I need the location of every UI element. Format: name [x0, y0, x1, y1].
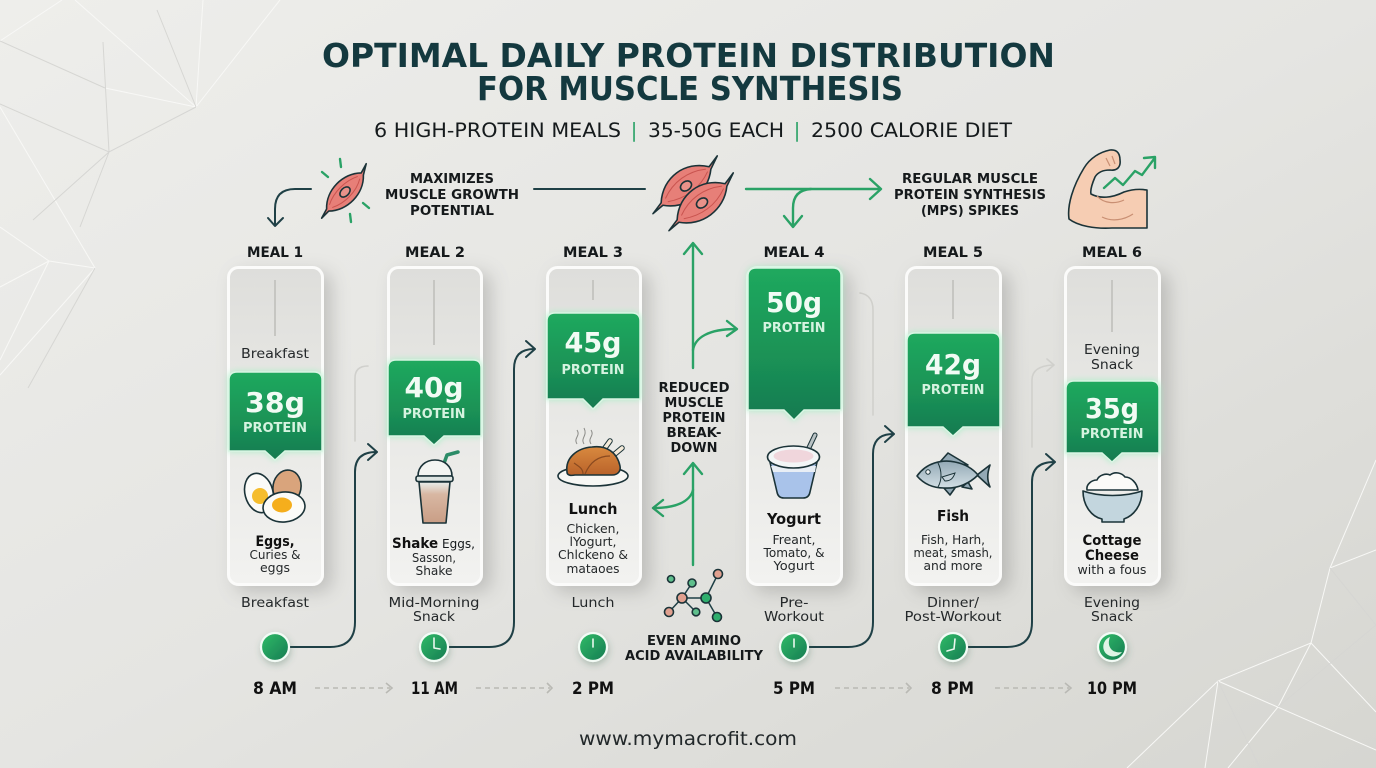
meal time labels: Pre-	[780, 595, 809, 611]
food description: Yogurt	[772, 558, 815, 573]
label: maximizes muscle growth potential: POTENTIAL	[410, 203, 494, 219]
subtitle: 6 HIGH-PROTEIN MEALS	[374, 119, 621, 142]
food description: meat, smash,	[914, 545, 992, 560]
protein badge: 38g	[229, 372, 322, 460]
protein badge: 45g: 45g	[564, 326, 622, 359]
connector line to muscle fibers	[534, 188, 645, 190]
food description: Fish, Harh,	[921, 532, 985, 547]
protein badge: 50g: 50g	[766, 286, 822, 319]
icon: yogurt cup	[768, 435, 820, 498]
protein badge: 45g	[547, 313, 640, 409]
food description: eggs	[260, 560, 290, 575]
protein badge: 40g	[388, 360, 481, 445]
meal time labels: Dinner/	[927, 595, 979, 611]
time labels: 5 PM	[773, 679, 815, 699]
faint background connectors	[355, 293, 1054, 447]
food description: Cheese	[1085, 548, 1139, 564]
label: reduced muscle protein breakdown: BREAK-	[666, 425, 722, 441]
food description: Tomato, &	[763, 545, 825, 560]
food description: and more	[924, 558, 983, 573]
food description: Curies &	[250, 547, 301, 562]
meal time labels: Evening	[1084, 595, 1140, 611]
label: regular muscle protein synthesis	[894, 171, 1046, 219]
panel: meal 6: MEAL 6	[1082, 245, 1142, 261]
food description: Shake	[416, 563, 453, 578]
time labels: 8 PM	[931, 679, 974, 699]
label: reduced muscle protein breakdown: PROTEIN	[662, 410, 726, 426]
website footer: www.mymacrofit.com	[579, 728, 797, 750]
time labels: 8 AM	[253, 679, 297, 699]
time labels: 10 PM	[1087, 679, 1137, 699]
protein badge: 35g	[1066, 381, 1159, 462]
protein badge: 50g: PROTEIN	[762, 321, 826, 336]
time labels	[253, 679, 1137, 699]
label: reduced muscle protein breakdown: MUSCLE	[664, 395, 724, 411]
icon: roast chicken	[558, 428, 628, 486]
food description: Eggs,	[256, 534, 294, 550]
food description: Fish	[937, 507, 969, 525]
protein badge: 42g: 42g	[925, 348, 981, 381]
protein badge: 42g	[907, 333, 1000, 436]
panel: meal 5	[906, 245, 1000, 584]
protein badge: 35g: PROTEIN	[1080, 427, 1144, 442]
food description	[914, 507, 992, 573]
subtitle: 35-50G EACH	[648, 119, 784, 142]
food description: Sasson,	[412, 550, 456, 565]
icon: muscle fiber with rays	[312, 159, 378, 225]
time labels: 2 PM	[572, 679, 614, 699]
clock: 5 PM	[780, 633, 808, 661]
panel: meal 3: MEAL 3	[563, 245, 623, 261]
label: reduced muscle protein breakdown	[658, 380, 730, 456]
clock: 11 AM	[420, 633, 448, 661]
panel: meal 1: Breakfast	[241, 346, 309, 362]
meal time labels: Lunch	[572, 595, 614, 611]
label: regular muscle protein synthesis: REGULAR MUSCLE	[902, 171, 1038, 187]
icon: protein shake	[416, 452, 458, 523]
label: maximizes muscle growth potential: MAXIMIZES	[410, 171, 494, 187]
panel: meal 6: Snack	[1091, 357, 1133, 373]
dashed timeline arrows	[315, 683, 1071, 693]
protein badge: 45g: PROTEIN	[562, 363, 624, 378]
arrow: green to synthesis label and meal 4	[746, 179, 881, 227]
panel: meal 4: MEAL 4	[764, 245, 825, 261]
panel: meal 6	[1066, 245, 1160, 584]
food description: mataoes	[566, 561, 620, 576]
vertical arrows around reduced breakdown	[653, 243, 737, 565]
label: reduced muscle protein breakdown: REDUCED	[658, 380, 730, 396]
subtitle	[374, 119, 1012, 142]
label: maximizes muscle growth potential	[385, 171, 519, 219]
food description	[1078, 533, 1146, 577]
subtitle: 2500 CALORIE DIET	[811, 119, 1012, 142]
clock: 8 PM	[939, 633, 967, 661]
icon: bowl of cottage cheese	[1083, 473, 1142, 522]
protein badge: 40g: 40g	[404, 371, 464, 404]
meal time labels: Workout	[764, 609, 824, 625]
label: even amino acid availability	[625, 633, 763, 664]
clock: 8 AM	[261, 633, 289, 661]
meal time labels: Mid-Morning	[388, 595, 480, 611]
meal time labels: Snack	[413, 609, 455, 625]
title: FOR MUSCLE SYNTHESIS	[477, 69, 903, 108]
food description: Yogurt	[766, 510, 821, 528]
icon: amino acid molecule	[664, 570, 722, 622]
food description	[558, 500, 628, 576]
protein badge: 50g	[748, 268, 841, 420]
meal time labels	[241, 595, 1140, 625]
icon: flexed arm with rising arrow	[1069, 150, 1155, 228]
panel: meal 1	[228, 245, 322, 584]
panel: meal 4	[748, 245, 842, 584]
panel: meal 2	[388, 245, 482, 584]
panel: meal 5: MEAL 5	[923, 245, 983, 261]
protein badge: 35g: 35g	[1085, 392, 1139, 425]
protein badge: 38g: 38g	[245, 386, 305, 419]
food description: Cottage	[1082, 533, 1142, 549]
label: even amino acid availability: EVEN AMINO	[647, 633, 741, 649]
protein badge: 38g: PROTEIN	[243, 421, 307, 436]
meal time labels: Snack	[1091, 609, 1133, 625]
food description: Shake Eggs,	[392, 536, 475, 552]
protein badge: 42g: PROTEIN	[922, 383, 984, 398]
connector arrows from clocks to next meal	[290, 341, 1055, 647]
icon: two muscle fibers	[642, 148, 745, 240]
food description: with a fous	[1078, 562, 1146, 577]
panel: meal 6: Evening	[1084, 342, 1140, 358]
meal time labels: Post-Workout	[904, 609, 1002, 625]
protein badge: 40g: PROTEIN	[402, 407, 466, 422]
clock: 10 PM moon	[1098, 633, 1126, 661]
label: maximizes muscle growth potential: MUSCLE GROWTH	[385, 187, 519, 203]
arrow: to meal 1	[268, 189, 311, 226]
label: reduced muscle protein breakdown: DOWN	[670, 440, 718, 456]
panel: meal 3	[547, 245, 640, 584]
food description	[250, 534, 301, 575]
title	[322, 36, 1055, 108]
icon: eggs	[240, 468, 306, 524]
food description: Chicken,	[566, 521, 620, 536]
food description: Freant,	[772, 532, 816, 547]
food description: Lunch	[568, 500, 618, 518]
food description: lYogurt,	[570, 534, 616, 549]
meal time labels: Breakfast	[241, 595, 309, 611]
label: regular muscle protein synthesis: PROTEIN SYNTHESIS	[894, 187, 1046, 203]
panel: meal 2: MEAL 2	[405, 245, 465, 261]
subtitle: |	[794, 119, 800, 142]
food description	[392, 536, 475, 578]
subtitle: |	[631, 119, 637, 142]
panel: meal 1: MEAL 1	[247, 245, 303, 261]
title: OPTIMAL DAILY PROTEIN DISTRIBUTION	[322, 36, 1055, 75]
time labels: 11 AM	[411, 679, 458, 699]
icon: fish	[917, 453, 990, 495]
food description: Chlckeno &	[558, 547, 628, 562]
clock: 2 PM	[579, 633, 607, 661]
label: even amino acid availability: ACID AVAILABILITY	[625, 648, 763, 664]
label: regular muscle protein synthesis: (MPS) SPIKES	[921, 203, 1019, 219]
food description	[763, 510, 825, 573]
